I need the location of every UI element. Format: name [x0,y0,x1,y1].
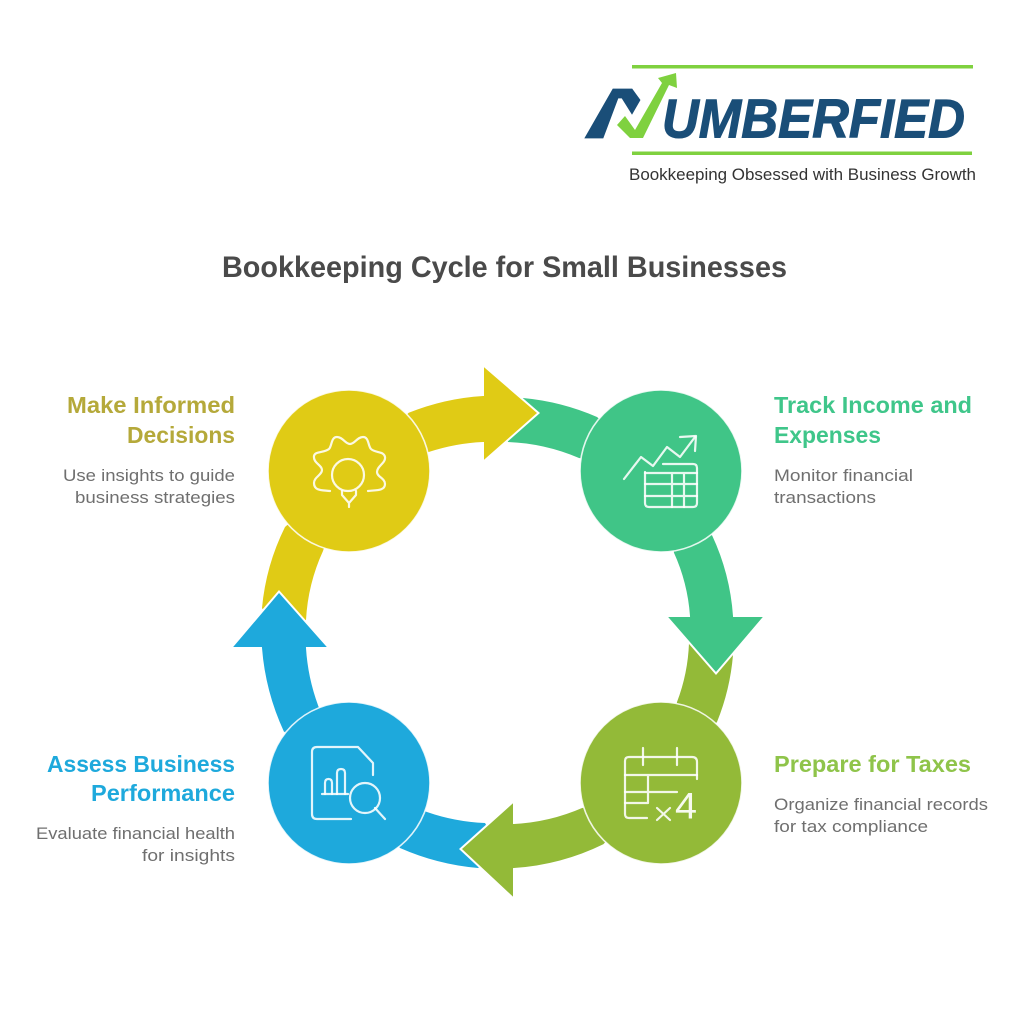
heading: Prepare for Taxes: Prepare for Taxes [774,751,971,777]
description: Prepare for Taxes [774,795,988,836]
heading: Assess Business Performance [47,751,235,806]
label: Track Income and Expenses [774,392,972,507]
band: into Track Income [500,398,661,471]
description: Track Income and Expenses: Monitor financial [774,466,913,485]
label: Make Informed Decisions [63,392,235,507]
description: Track Income and Expenses: transactions [774,488,876,507]
icon: document with chart and magnifier [312,747,385,819]
circle: Track Income and Expenses [580,390,742,552]
icon: chart with table [624,436,697,507]
circle: Prepare for Taxes [580,702,742,864]
description: Assess Business Performance [36,824,235,865]
band: into Assess Business Performance [349,783,495,868]
arrow: blue [231,592,349,783]
description: Make Informed Decisions: Use insights to guide [63,466,235,485]
band: into Make Informed Decisions [262,471,349,625]
heading: Track Income and Expenses: Track Income and [774,392,972,418]
arrow: olive [460,783,661,899]
description: Assess Business Performance: for insights [142,846,235,865]
heading: Track Income and Expenses: Expenses [774,422,881,448]
circle: Assess Business Performance [268,702,430,864]
heading: Assess Business Performance: Assess Business [47,751,235,777]
logo wordmark: UMBERFIED [662,88,965,150]
logo mark: green growth arrow [617,73,677,138]
description: Track Income and Expenses [774,466,913,507]
icon: gear with light bulb [314,437,385,507]
band: into Prepare for Taxes [661,630,734,783]
logo: Numberfied [585,65,976,184]
circle: Make Informed Decisions [268,390,430,552]
heading: Assess Business Performance: Performance [91,780,235,806]
icon: calendar times four [625,748,697,820]
heading: Make Informed Decisions: Make Informed [67,392,235,418]
title: Bookkeeping Cycle for Small Businesses [222,251,787,284]
description: Assess Business Performance: Evaluate financial health [36,824,235,843]
arrow: yellow [349,365,538,471]
description: Make Informed Decisions: business strategies [75,488,235,507]
arrow: green [661,471,765,674]
heading: Track Income and Expenses [774,392,972,448]
heading: Make Informed Decisions [67,392,235,448]
heading: Make Informed Decisions: Decisions [127,422,235,448]
cycle diagram [231,365,765,899]
description: Prepare for Taxes: for tax compliance [774,817,928,836]
label: Prepare for Taxes [774,751,988,836]
logo mark: navy N [585,89,640,138]
logo tagline: Bookkeeping Obsessed with Business Growth [629,166,976,184]
description: Prepare for Taxes: Organize financial records [774,795,988,814]
label: Assess Business Performance [36,751,235,865]
description: Make Informed Decisions [63,466,235,507]
icon label: four: 4 [675,786,697,826]
